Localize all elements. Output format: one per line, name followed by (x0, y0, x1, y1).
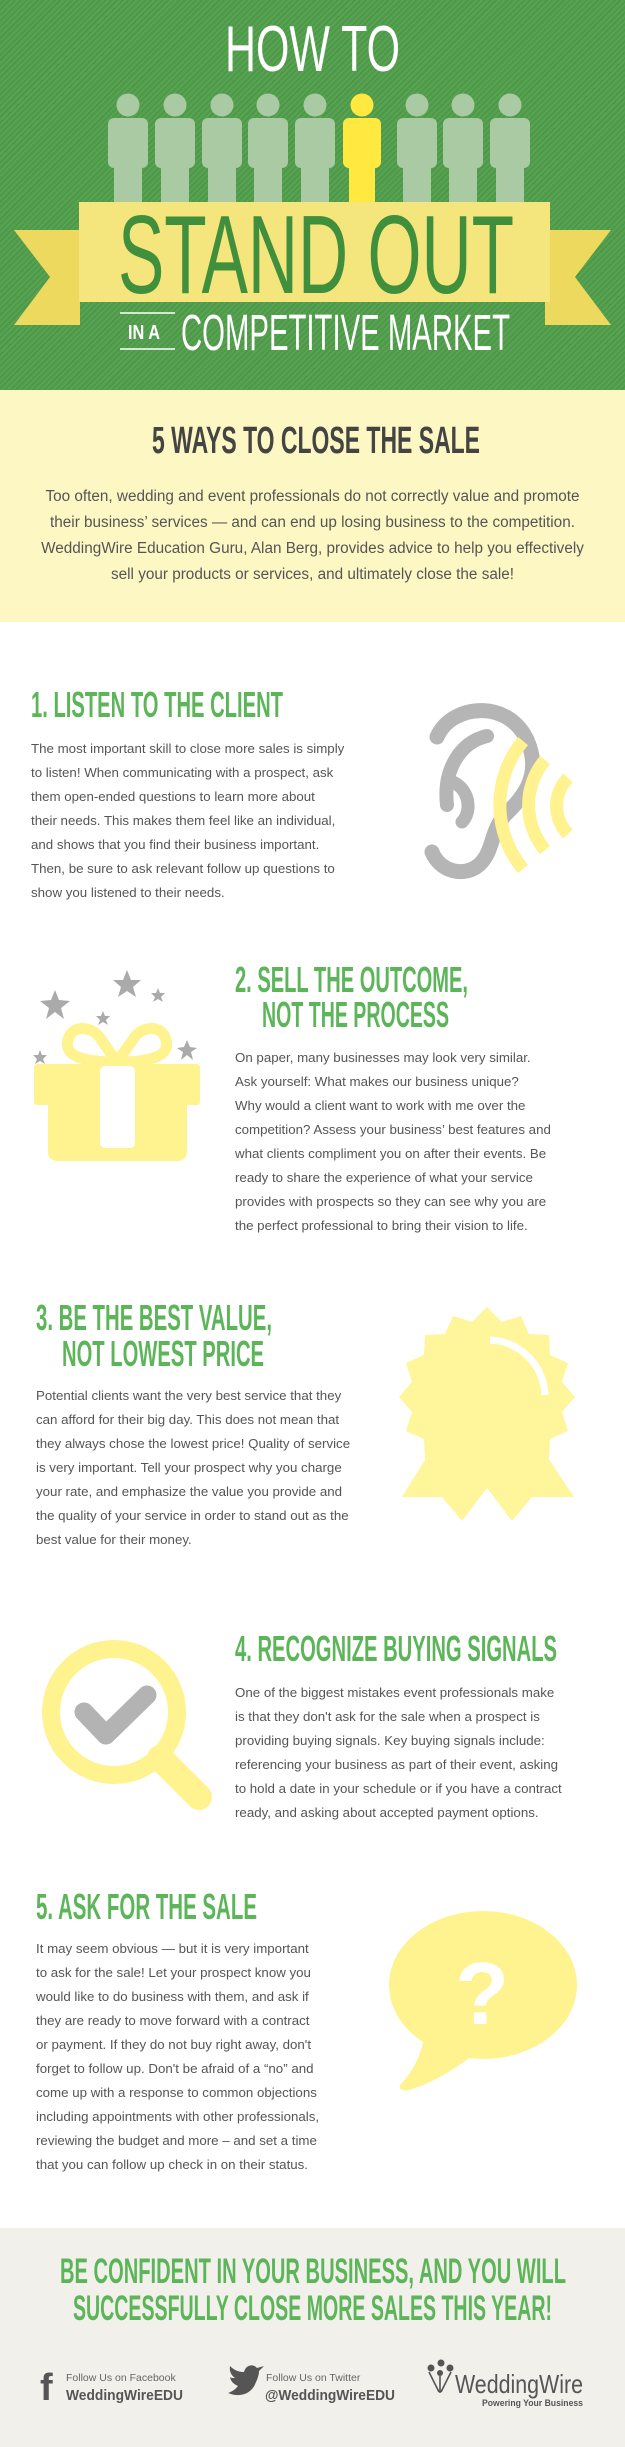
body 1: their needs. This makes them feel like an individual, (31, 813, 335, 828)
twitter label (265, 2372, 395, 2404)
body 5: or payment. If they do not buy right away, don't (36, 2037, 311, 2052)
body 5: forget to follow up. Don't be afraid of a “no” and (36, 2061, 314, 2076)
facebook label: Follow Us on Facebook (66, 2372, 176, 2384)
body 4: to hold a date in your schedule or if you have a contract (235, 1781, 562, 1796)
body 5: It may seem obvious — but it is very important (36, 1941, 309, 1956)
subtitle: in a competitive market: IN A (128, 322, 160, 344)
logo: weddingwire: Powering Your Business (482, 2398, 583, 2408)
icon: facebook: f (40, 2367, 53, 2409)
logo: weddingwire: WeddingWire (455, 2369, 583, 2399)
body 5 (36, 1941, 319, 2172)
body 1: them open-ended questions to learn more about (31, 789, 315, 804)
body 4: is that they don't ask for the sale when a prospect is (235, 1709, 540, 1724)
section 3: best value (36, 1297, 575, 1547)
body 2: Why would a client want to work with me over the (235, 1098, 525, 1113)
body 5: they are ready to move forward with a contract (36, 2013, 309, 2028)
body 4: referencing your business as part of their event, asking (235, 1757, 558, 1772)
section 1: listen (31, 684, 572, 900)
body 1: and shows that you find their business important. (31, 837, 319, 852)
icon: gift with stars (33, 970, 200, 1161)
body 1: to listen! When communicating with a prospect, ask (31, 765, 333, 780)
icon: crowd of people (108, 94, 530, 202)
logo: weddingwire (428, 2360, 583, 2408)
body 1: Then, be sure to ask relevant follow up questions to (31, 861, 335, 876)
heading 3: 3. BE THE BEST VALUE, (36, 1297, 272, 1338)
body 2: what clients compliment you on after their events. Be (235, 1146, 546, 1161)
body 3 (36, 1388, 350, 1547)
section 2: sell the outcome (33, 959, 551, 1233)
intro panel (0, 390, 625, 622)
header panel (0, 0, 625, 390)
heading 1: 1. LISTEN TO THE CLIENT (31, 684, 283, 725)
heading 2: NOT THE PROCESS (262, 994, 449, 1035)
intro paragraph: sell your products or services, and ultimately close the sale! (111, 566, 514, 583)
icon: speech bubble with question mark (389, 1911, 577, 2090)
body 2: competition? Assess your business’ best features and (235, 1122, 551, 1137)
heading 3 (36, 1297, 272, 1374)
body 1 (31, 741, 344, 900)
footer panel (0, 2228, 625, 2447)
body 4 (235, 1685, 562, 1820)
intro paragraph: their business’ services — and can end up losing business to the competition. (50, 514, 575, 531)
body 1: show you listened to their needs. (31, 885, 225, 900)
body 4: providing buying signals. Key buying signals include: (235, 1733, 545, 1748)
twitter label: @WeddingWireEDU (265, 2387, 395, 2404)
body 3: they always chose the lowest price! Quality of service (36, 1436, 350, 1451)
icon: award badge (399, 1307, 575, 1521)
body 5: reviewing the budget and more – and set a time (36, 2133, 317, 2148)
heading 5: 5. ASK FOR THE SALE (36, 1886, 257, 1927)
body 2: ready to share the experience of what your service (235, 1170, 533, 1185)
icon: speech bubble with question mark: ? (455, 1944, 509, 2043)
twitter label: Follow Us on Twitter (266, 2372, 361, 2384)
body 5: including appointments with other professionals, (36, 2109, 319, 2124)
icon: magnifier with check (51, 1649, 199, 1797)
body 2: Ask yourself: What makes our business unique? (235, 1074, 519, 1089)
body 4: One of the biggest mistakes event professionals make (235, 1685, 554, 1700)
body 2: the perfect professional to bring their vision to life. (235, 1218, 528, 1233)
heading 2 (235, 959, 468, 1035)
body 1: The most important skill to close more sales is simply (31, 741, 344, 756)
body 3: the quality of your service in order to stand out as the (36, 1508, 349, 1523)
title: how to: HOW TO (225, 12, 400, 85)
subtitle: in a competitive market (120, 304, 510, 361)
body 3: Potential clients want the very best service that they (36, 1388, 341, 1403)
body 5: come up with a response to common objections (36, 2085, 317, 2100)
body 5: that you can follow up check in on their status. (36, 2157, 308, 2172)
icon: twitter bird (228, 2365, 264, 2395)
heading 3: NOT LOWEST PRICE (62, 1333, 264, 1374)
intro paragraph (41, 488, 584, 583)
body 2: provides with prospects so they can see why you are (235, 1194, 546, 1209)
body 3: your rate, and emphasize the value you provide and (36, 1484, 342, 1499)
body 3: best value for their money. (36, 1532, 192, 1547)
facebook label: WeddingWireEDU (66, 2387, 183, 2404)
body 2 (235, 1050, 551, 1233)
intro paragraph: Too often, wedding and event professionals do not correctly value and promote (45, 488, 580, 505)
body 4: ready, and asking about accepted payment options. (235, 1805, 539, 1820)
body 3: can afford for their big day. This does not mean that (36, 1412, 339, 1427)
section 4: buying signals (42, 1628, 562, 1820)
body 5: would like to do business with them, and ask if (36, 1989, 309, 2004)
facebook label (66, 2372, 183, 2404)
body 5: to ask for the sale! Let your prospect know you (36, 1965, 311, 1980)
body 3: is very important. Tell your prospect why you charge (36, 1460, 342, 1475)
intro paragraph: WeddingWire Education Guru, Alan Berg, provides advice to help you effectively (41, 540, 584, 557)
banner ribbon (14, 202, 611, 325)
body 2: On paper, many businesses may look very similar. (235, 1050, 531, 1065)
icon: ear (432, 711, 568, 872)
closing statement (60, 2252, 566, 2328)
section 5: ask for the sale (36, 1886, 577, 2172)
